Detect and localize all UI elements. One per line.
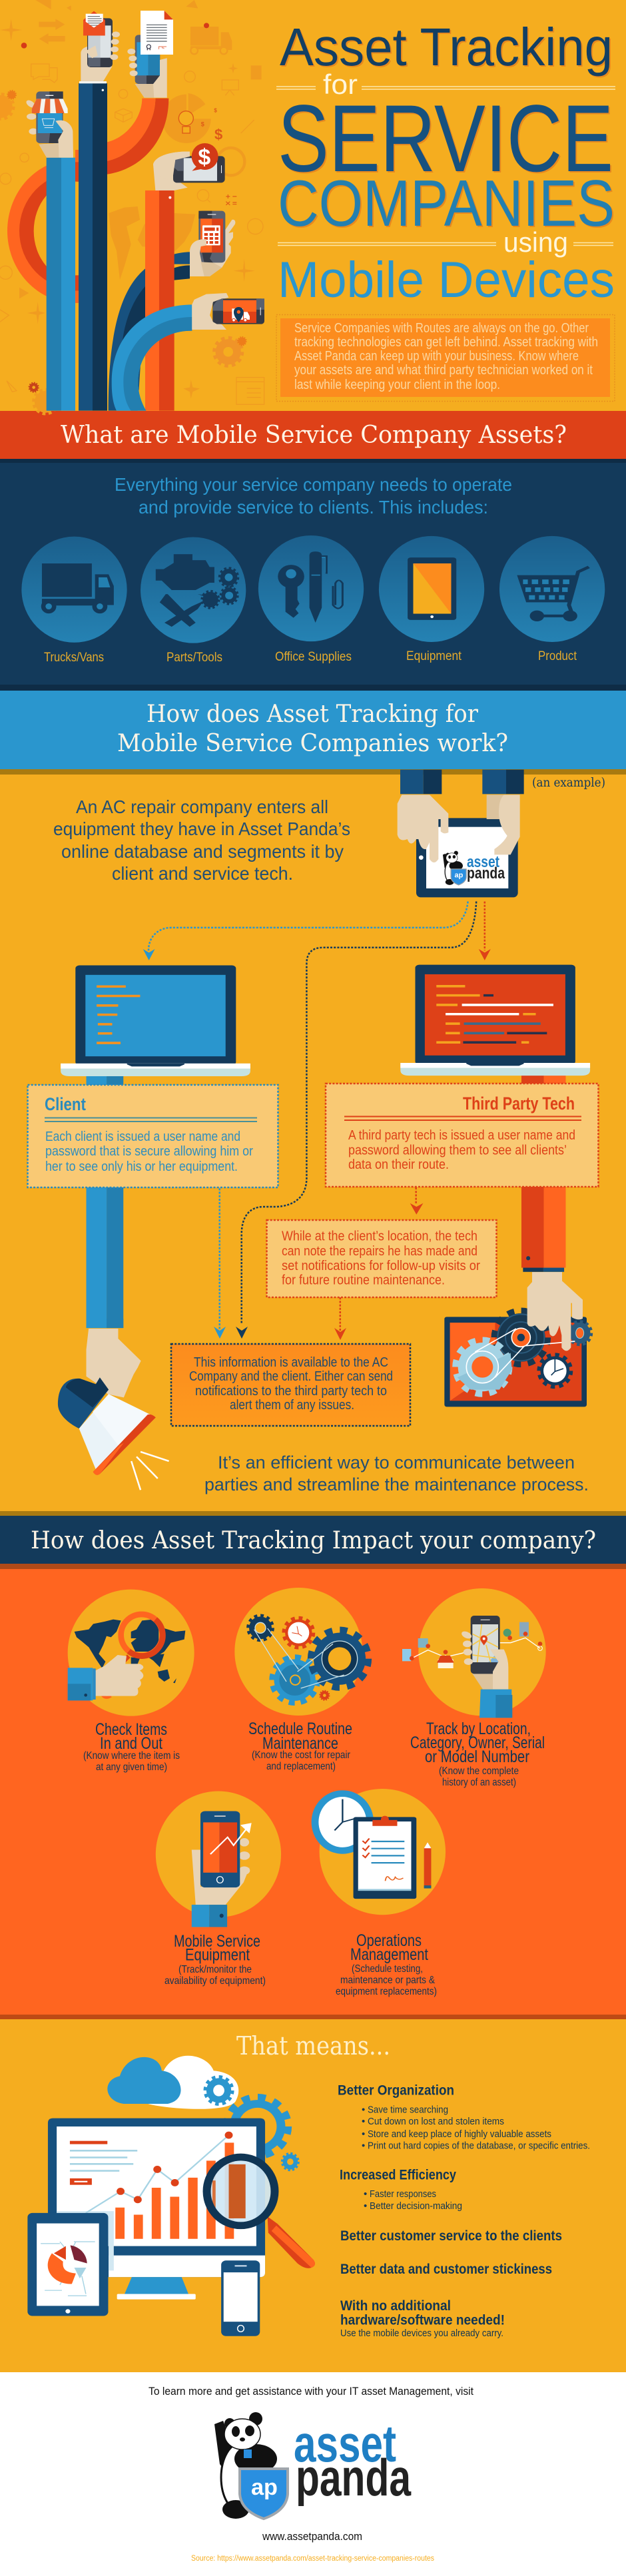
third party tech heading: Third Party Tech [463, 1094, 575, 1114]
caption: track by location [410, 1720, 545, 1788]
caption: check items: In and Out [100, 1734, 162, 1753]
benefit: better organization: • [362, 2140, 365, 2151]
icon: check items map [68, 1590, 194, 1716]
icon: operations clipboard [312, 1789, 446, 1915]
hand with megaphone [58, 1319, 169, 1490]
benefit: increased efficiency [340, 2167, 462, 2212]
logo wordmark: asset [294, 2414, 396, 2473]
magnifier [207, 2157, 315, 2268]
panda mascot: ap [251, 2475, 278, 2500]
panel: client location note: can note the repairs he has made and [282, 1244, 477, 1259]
text: AC repair company: client and service tech. [112, 863, 293, 884]
panel: third party tech [326, 1084, 598, 1187]
intro to assets: Everything your service company needs to operate [115, 474, 512, 495]
closing statement: parties and streamline the maintenance process. [204, 1474, 589, 1494]
icon: location tracking phone [402, 1588, 546, 1718]
caption: track by location: Track by Location, [426, 1720, 531, 1738]
heading: How does Asset Tracking for Mobile Service Companies work?: Mobile Service Companies work? [117, 730, 508, 757]
panel: information available [171, 1344, 410, 1426]
caption: track by location: or Model Number [425, 1748, 529, 1766]
asset labels: Product [538, 649, 577, 663]
caption: mobile service equipment: Mobile Service [174, 1932, 260, 1951]
intro to assets [115, 474, 512, 517]
caption: operations management: (Schedule testing, [352, 1963, 423, 1975]
example note: (an example) [532, 775, 605, 790]
text: AC repair company: An AC repair company enters all [76, 797, 328, 817]
Asset Panda logo [214, 2412, 411, 2519]
hand and gears screen [444, 1272, 591, 1407]
title line: Asset Tracking: Asset Tracking [280, 17, 613, 77]
benefit: increased efficiency: Increased Efficiency [340, 2167, 456, 2183]
hand with phone and shop awning [25, 91, 73, 158]
third party tech laptop and arm [400, 965, 590, 1272]
caption: mobile service equipment [164, 1932, 266, 1987]
call to action: To learn more and get assistance with your IT asset Management, visit [149, 2385, 473, 2398]
closing statement [204, 1452, 589, 1494]
title word: for: for [323, 69, 358, 100]
icon: engine and tools [141, 537, 246, 643]
caption: schedule routine maintenance: Maintenance [262, 1734, 338, 1753]
impact icons row one [68, 1588, 368, 1716]
monitor [48, 2118, 265, 2300]
benefit: better organization [338, 2083, 590, 2151]
benefit: better organization: Print out hard copies of the database, or specific entries. [368, 2140, 590, 2151]
caption: track by location: Category, Owner, Serial [410, 1734, 545, 1752]
icon: tablet equipment [379, 536, 484, 642]
benefit: increased efficiency: • [364, 2200, 367, 2212]
caption: check items: at any given time) [96, 1762, 167, 1773]
benefit: better organization: • [362, 2128, 365, 2140]
asset labels [44, 649, 577, 665]
panda mascot [214, 2412, 288, 2519]
client laptop and arm [61, 966, 250, 1328]
benefit: better organization: Better Organization [338, 2083, 454, 2098]
panel: information available: This information is available to the AC [194, 1355, 388, 1370]
hand with truck phone [192, 293, 264, 330]
caption: operations management: maintenance or parts & [340, 1975, 435, 1986]
tech body text: A third party tech is issued a user name and [348, 1128, 575, 1143]
intro text panel: last while keeping your client in the loop. [294, 377, 500, 392]
title [276, 17, 615, 308]
logo wordmark: panda [296, 2448, 411, 2507]
logo text small: asset [467, 853, 499, 871]
caption: operations management [336, 1931, 437, 1997]
arrowheads at information box [214, 1327, 346, 1340]
heading: How does Asset Tracking for Mobile Service Companies work?: How does Asset Tracking for [147, 701, 479, 728]
source: Source: https://www.assetpanda.com/asset-tracking-service-companies-routes [191, 2555, 434, 2563]
caption: schedule routine maintenance [248, 1720, 352, 1772]
flow arrows lower [220, 1187, 423, 1331]
orange arm curve to top right [107, 99, 168, 174]
arrow: to third party tech [479, 902, 491, 960]
tablet [27, 2213, 108, 2316]
text: AC repair company: equipment they have in Asset Panda’s [53, 818, 350, 839]
title double rule right of for [362, 87, 615, 89]
red location pins and symbols: $ [214, 108, 217, 114]
benefit: better organization: Save time searching [368, 2104, 448, 2115]
caption: operations management: Operations [356, 1931, 422, 1950]
curved blue arm [112, 304, 192, 411]
icon: mobile equipment phone [156, 1791, 281, 1927]
title double rule right of using [573, 242, 613, 245]
phone [221, 2260, 260, 2336]
arrow: to information box navy [242, 902, 476, 1323]
asset icons row [21, 535, 605, 643]
benefit: data and stickiness: Better data and customer stickiness [340, 2262, 552, 2277]
red location pins and symbols: $ [214, 126, 222, 143]
icon: office supplies [258, 535, 364, 641]
blue arm [47, 158, 75, 411]
benefit: increased efficiency: • [364, 2188, 367, 2200]
hand with calculator phone [190, 211, 235, 276]
panel: client location note: While at the client’s location, the tech [282, 1229, 477, 1244]
hand with phone and envelope [81, 11, 120, 81]
benefit: no additional hardware: Use the mobile devices you already carry. [340, 2328, 503, 2339]
asset labels: Trucks/Vans [44, 651, 104, 665]
panel: information available: notifications to the third party tech to [195, 1384, 387, 1399]
curved navy arm [109, 252, 190, 411]
hero illustration: hands holding phones [0, 0, 264, 414]
caption: check items [83, 1720, 180, 1773]
hand with phone and document [127, 11, 173, 98]
arrow: note to information box [340, 1297, 341, 1331]
benefit: customer service: Better customer service to the clients [340, 2228, 562, 2244]
benefit: no additional hardware [340, 2298, 505, 2339]
benefit: no additional hardware: hardware/software needed! [340, 2312, 505, 2328]
logo panda small [443, 851, 466, 885]
client body text: password that is secure allowing him or [45, 1144, 253, 1159]
caption: schedule routine maintenance: Schedule Routine [248, 1720, 352, 1738]
red location pins and symbols [21, 23, 236, 205]
asset labels: Office Supplies [275, 650, 352, 664]
orange arm loop [7, 150, 79, 303]
tablet with hands and Asset Panda logo [398, 770, 524, 897]
hand [527, 1272, 583, 1351]
benefit: increased efficiency: Better decision-making [370, 2200, 462, 2212]
asset labels: Parts/Tools [166, 651, 222, 665]
tech body text: password allowing them to see all clients’ [348, 1143, 567, 1157]
caption: operations management: equipment replacements) [336, 1986, 437, 1997]
panel: client location note [266, 1220, 497, 1297]
caption: mobile service equipment: (Track/monitor the [178, 1964, 252, 1975]
benefit: no additional hardware: With no additional [340, 2298, 451, 2314]
orange arm [145, 190, 174, 411]
title line: Mobile Devices: Mobile Devices [278, 252, 615, 308]
panel: client location note: for future routine maintenance. [282, 1273, 445, 1288]
faint background icons [0, 0, 264, 414]
client body text: her to see only his or her equipment. [45, 1159, 238, 1174]
title double rule left of for [276, 87, 316, 89]
caption: mobile service equipment: availability of equipment) [164, 1975, 266, 1987]
benefit: better organization: • [362, 2104, 365, 2115]
icon: shopping cart [499, 536, 605, 642]
panel: information available: Company and the client. Either can send [189, 1369, 393, 1384]
tablet with hands and Asset Panda logo: panda [467, 864, 505, 882]
caption: schedule routine maintenance: (Know the cost for repair [252, 1750, 351, 1761]
closing statement: It’s an efficient way to communicate between [218, 1452, 575, 1472]
heading: What are Mobile Service Company Assets?: What are Mobile Service Company Assets? [61, 422, 567, 449]
caption: track by location: history of an asset) [442, 1777, 516, 1788]
icon: truck [21, 537, 127, 643]
heading: That means: That means... [236, 2031, 390, 2061]
benefits list [338, 2083, 590, 2339]
caption: operations management: Management [350, 1945, 428, 1964]
text: AC repair company: online database and segments it by [61, 841, 344, 862]
caption: schedule routine maintenance: and replacement) [266, 1761, 336, 1772]
navy arm [79, 81, 107, 411]
client body text: Each client is issued a user name and [45, 1129, 240, 1144]
caption: check items: (Know where the item is [83, 1750, 180, 1762]
hand with phone and dollar bubble: $ [198, 145, 210, 170]
benefit: increased efficiency: Faster responses [370, 2188, 436, 2200]
client heading: Client [45, 1094, 86, 1114]
red location pins and symbols: $ [201, 121, 205, 127]
title word: using: using [503, 226, 568, 258]
hand with phone and dollar bubble [153, 143, 225, 190]
icon: maintenance gears [234, 1588, 368, 1716]
benefit: better organization: • [362, 2116, 365, 2127]
title double rule left of using [278, 242, 496, 245]
arrow: tech to note [410, 1187, 423, 1215]
logo panda small: ap [455, 871, 464, 879]
benefit: better organization: Store and keep place of highly valuable assets [368, 2128, 551, 2140]
heading: How does Asset Tracking Impact your company?: How does Asset Tracking Impact your company? [31, 1527, 596, 1554]
caption: track by location: (Know the complete [439, 1766, 519, 1777]
impact captions [83, 1720, 545, 1997]
caption: check items: Check Items [95, 1720, 167, 1739]
heading: How does Asset Tracking for Mobile Service Companies work? [117, 701, 508, 757]
caption: mobile service equipment: Equipment [185, 1946, 250, 1965]
impact icons row two [156, 1789, 446, 1927]
benefit: better organization: Cut down on lost and stolen items [368, 2116, 504, 2127]
logo wordmark [294, 2414, 411, 2507]
arrow: client to information box [218, 1188, 220, 1329]
text: AC repair company [53, 797, 350, 884]
panel: client location note: set notifications for follow-up visits or [282, 1259, 480, 1273]
asset labels: Equipment [406, 649, 462, 663]
arrow: to client [143, 902, 468, 960]
panel: information available: alert them of any issues. [230, 1398, 354, 1413]
illustration: monitor, tablet, phone, magnifier [27, 2056, 315, 2336]
client body text [45, 1129, 253, 1174]
panel: client [28, 1085, 278, 1187]
tech body text [348, 1128, 575, 1172]
intro to assets: and provide service to clients. This includes: [139, 497, 488, 517]
background gears [227, 2097, 298, 2170]
intro text panel [276, 314, 615, 401]
clouds [107, 2056, 238, 2109]
flow arrows [143, 902, 491, 1323]
website: www.assetpanda.com [262, 2530, 362, 2543]
tech body text: data on their route. [348, 1157, 449, 1172]
